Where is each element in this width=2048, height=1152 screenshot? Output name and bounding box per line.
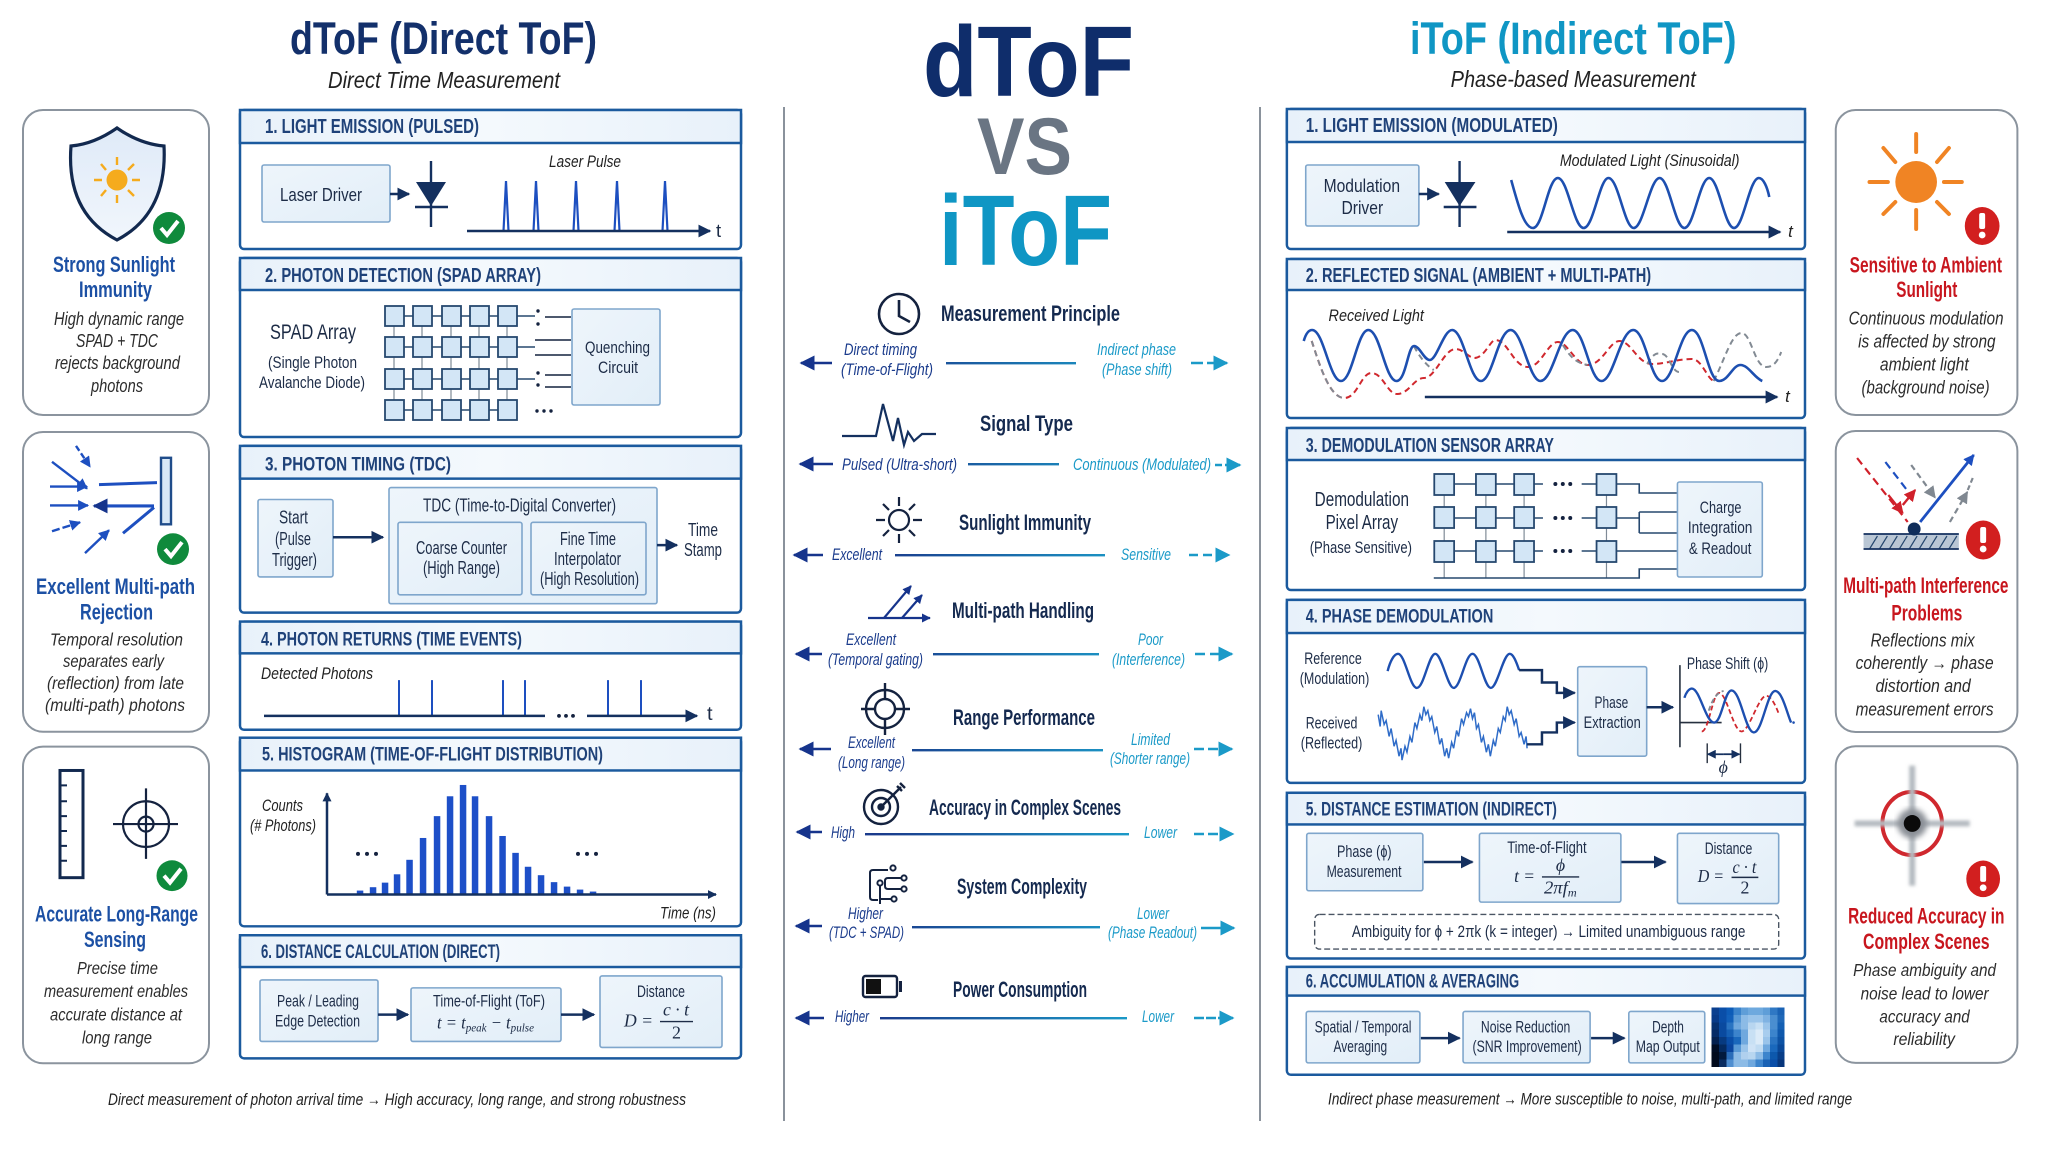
comparison row: range performance (800, 683, 1232, 772)
panel 4: phase demodulation: Received (1306, 714, 1357, 732)
panel 3: demodulation sensor array: Demodulation (1315, 489, 1409, 511)
panel 6: distance calculation (direct): 6. DISTANCE CALCULATION (DIRECT) (261, 941, 500, 963)
card: multi-path interference problems: coherently → phase (1856, 653, 1994, 673)
box: phase measurement: Phase (ϕ) (1337, 842, 1392, 861)
panel 5: histogram (240, 738, 741, 926)
panel 4: phase demodulation: Reference (1304, 649, 1362, 668)
panel 4: phase demodulation: (Modulation) (1300, 669, 1369, 688)
comparison row: signal type: Signal Type (980, 411, 1073, 436)
panel 3: photon timing (TDC): Stamp (684, 539, 722, 560)
box: noise reduction (1463, 1011, 1590, 1063)
diagram: demodulation pixel array (1434, 474, 1677, 578)
comparison row: measurement principle: Direct timing (844, 341, 918, 359)
box: distance formula: 2 (672, 1023, 681, 1042)
callout: ambiguity note (1315, 914, 1779, 949)
box: distance formula: D = (623, 1011, 653, 1031)
comparison row: signal type (800, 404, 1240, 474)
card: reduced accuracy in complex scenes: accuracy and (1879, 1006, 1971, 1026)
panel 5: histogram: 5. HISTOGRAM (TIME-OF-FLIGHT DISTRIBUTION) (262, 744, 603, 766)
card: multi-path interference problems: Problems (1891, 601, 1962, 626)
icon: circuit (870, 865, 907, 904)
box: start pulse trigger: Trigger) (272, 549, 317, 570)
arrow: received to phase extraction (1527, 723, 1575, 744)
comparison row: power consumption (796, 976, 1233, 1026)
panel 5: histogram: (# Photons) (250, 816, 316, 835)
icon: clock (879, 294, 919, 334)
comparison row: measurement principle: Measurement Principle (941, 301, 1120, 326)
icon: blurred target with alert (1855, 766, 2000, 897)
card: multi-path interference problems: measurement errors (1856, 700, 1994, 720)
panel 3: photon timing (TDC) (240, 446, 741, 613)
panel 3: photon timing (TDC): 3. PHOTON TIMING (TDC) (265, 454, 451, 476)
box: charge integration and readout (1677, 482, 1762, 577)
box: time-of-flight formula: t = (1514, 866, 1535, 886)
icon: multi-path reflections with check (50, 446, 189, 565)
box: modulation driver: Driver (1341, 197, 1383, 218)
comparison row: sunlight immunity: Sensitive (1121, 546, 1171, 564)
panel 6: distance calculation (direct) (240, 935, 741, 1058)
card: strong sunlight immunity (23, 110, 209, 415)
panel 4: photon returns (time events) (240, 622, 741, 730)
box: distance formula: c · t (1733, 857, 1757, 877)
panel 3: demodulation sensor array: Pixel Array (1326, 512, 1398, 534)
subheading: direct time measurement: Direct Time Measurement (328, 67, 561, 93)
comparison row: range performance: Range Performance (953, 705, 1095, 730)
box: phase measurement: Measurement (1327, 862, 1402, 881)
comparison row: multi-path handling (796, 586, 1232, 669)
box: depth map output: Map Output (1636, 1037, 1700, 1056)
card: accurate long-range sensing: measurement enables (44, 981, 188, 1001)
card: strong sunlight immunity: photons (90, 376, 143, 396)
comparison row: system complexity: Lower (1137, 905, 1170, 923)
card: reduced accuracy in complex scenes: Phase ambiguity and (1853, 960, 1997, 980)
card: strong sunlight immunity: Immunity (79, 277, 153, 302)
heading: iToF (Indirect ToF): iToF (Indirect ToF) (1410, 13, 1737, 64)
comparison row: signal type: Pulsed (Ultra-short) (842, 456, 957, 474)
comparison row: multi-path handling: (Interference) (1112, 651, 1185, 669)
card: strong sunlight immunity: SPAD + TDC (76, 331, 159, 351)
chart: sinusoidal modulated light: t (1788, 222, 1794, 241)
comparison row: multi-path handling: Poor (1138, 631, 1164, 649)
box: distance formula: 2 (1740, 878, 1749, 898)
panel 1: light emission (pulsed) (240, 110, 741, 249)
comparison row: measurement principle: (Phase shift) (1102, 361, 1172, 379)
panel 4: phase demodulation (1287, 600, 1805, 783)
panel 4: phase demodulation: 4. PHASE DEMODULATION (1306, 606, 1493, 628)
box: spatial / temporal averaging: Spatial / Temporal (1315, 1018, 1411, 1037)
comparison row: system complexity: System Complexity (957, 874, 1087, 899)
comparison row: accuracy in complex scenes: Lower (1144, 824, 1178, 842)
box: TDC with coarse counter and fine interpolator: (High Range) (423, 557, 500, 578)
card: sensitive to ambient sunlight: is affected by strong (1858, 331, 1996, 352)
card: reduced accuracy in complex scenes: Complex Scenes (1863, 929, 1990, 954)
diagram: SPAD pixel array (385, 306, 571, 420)
box: time-of-flight formula (411, 988, 561, 1041)
card: sensitive to ambient sunlight: (background noise) (1862, 377, 1990, 398)
comparison row: range performance: (Long range) (838, 754, 905, 772)
panel 3: demodulation sensor array (1287, 428, 1805, 590)
comparison row: system complexity: (TDC + SPAD) (829, 924, 904, 942)
box: phase extraction (1578, 667, 1647, 756)
icon: crosshair target with check (113, 788, 188, 891)
comparison row: system complexity: (Phase Readout) (1108, 924, 1197, 942)
box: phase extraction: Extraction (1584, 713, 1641, 732)
box: time-of-flight formula (1479, 833, 1621, 902)
card: strong sunlight immunity: rejects background (55, 353, 181, 373)
chart: time-of-flight histogram: Time (ns) (660, 903, 716, 922)
panel 1: light emission (pulsed): Laser Pulse (549, 152, 621, 171)
box: peak / leading edge detection: Peak / Leading (277, 992, 359, 1011)
panel 2: photon detection (SPAD array): Avalanche Diode) (259, 373, 365, 392)
callout: ambiguity note: Ambiguity for ϕ + 2πk (k = integer) → Limited unambiguous range (1352, 922, 1745, 941)
box: depth map output: Depth (1652, 1018, 1684, 1037)
chart: laser pulse train: t (716, 220, 721, 241)
card: sensitive to ambient sunlight: ambient light (1880, 354, 1970, 375)
icon: crosshair target (861, 683, 910, 735)
box: start pulse trigger: (Pulse (275, 528, 311, 549)
box: time-of-flight formula: − t (487, 1013, 512, 1033)
box: charge integration and readout: & Readout (1689, 539, 1752, 558)
card: accurate long-range sensing: long range (82, 1028, 152, 1047)
lower right group (panels 4-6, card 3, footer) (1287, 600, 2017, 1108)
chart: sinusoidal modulated light (1507, 178, 1794, 241)
chart: received light with ambient and multi-path waves (1304, 330, 1791, 406)
chart: noisy received wave (1378, 707, 1527, 760)
panel 3: photon timing (TDC): Time (688, 519, 718, 540)
panel 3: demodulation sensor array: 3. DEMODULATION SENSOR ARRAY (1306, 435, 1554, 457)
box: time-of-flight formula: pulse (510, 1021, 535, 1035)
box: TDC with coarse counter and fine interpolator: TDC (Time-to-Digital Converter) (423, 494, 616, 515)
comparison row: range performance: Limited (1131, 731, 1171, 749)
panel 4: photon returns (time events): Detected Photons (261, 664, 373, 683)
box: peak / leading edge detection: Edge Detection (275, 1012, 360, 1031)
comparison row: signal type: Continuous (Modulated) (1073, 456, 1211, 474)
card: strong sunlight immunity: Strong Sunlight (53, 252, 175, 277)
card: excellent multi-path rejection: (reflection) from late (47, 673, 184, 693)
card: accurate long-range sensing (23, 747, 209, 1063)
chart: detected photon events: t (707, 703, 713, 725)
box: distance formula: D = (1697, 866, 1724, 886)
icon: bullseye with dart (864, 783, 905, 824)
comparison row: multi-path handling: Multi-path Handling (952, 598, 1094, 623)
chart: reference modulation wave (1388, 654, 1519, 688)
main title: VS: VS (977, 102, 1072, 192)
card: excellent multi-path rejection (23, 432, 209, 732)
image: depth map (1712, 1007, 1785, 1067)
footer note: iToF summary: Indirect phase measurement → More susceptible to noise, multi-path, and limited range (1328, 1089, 1852, 1108)
icon: ruler (60, 770, 83, 878)
main title: iToF: iToF (939, 175, 1112, 287)
icon: orange sun with alert (1870, 134, 2000, 245)
comparison row: accuracy in complex scenes (797, 783, 1233, 842)
card: excellent multi-path rejection: Rejection (80, 600, 153, 625)
box: distance formula: Distance (637, 982, 685, 1001)
comparison row: system complexity: Higher (848, 905, 884, 923)
icon: laser diode (415, 161, 448, 227)
box: spatial / temporal averaging: Averaging (1334, 1037, 1387, 1056)
panel 5: distance estimation (indirect) (1287, 793, 1805, 958)
box: laser driver: Laser Driver (280, 184, 362, 205)
box: TDC with coarse counter and fine interpolator (389, 488, 657, 604)
panel 3: demodulation sensor array: (Phase Sensitive) (1310, 538, 1412, 557)
panel 2: reflected signal (1287, 259, 1805, 418)
box: modulation driver (1306, 165, 1419, 226)
box: distance formula: c · t (663, 1000, 690, 1020)
card: excellent multi-path rejection: Excellent Multi-path (36, 574, 195, 599)
panel 5: histogram: Counts (262, 796, 303, 815)
main title: dToF: dToF (923, 6, 1134, 118)
card: excellent multi-path rejection: Temporal resolution (50, 629, 183, 649)
panel 6: accumulation and averaging: 6. ACCUMULATION & AVERAGING (1306, 971, 1519, 993)
panel 1: light emission (modulated): 1. LIGHT EMISSION (MODULATED) (1306, 115, 1558, 137)
box: distance formula (600, 976, 722, 1047)
card: reduced accuracy in complex scenes (1836, 746, 2017, 1063)
card: sensitive to ambient sunlight (1836, 110, 2017, 415)
comparison row: power consumption: Higher (835, 1008, 870, 1026)
box: phase measurement (1307, 833, 1423, 891)
panel 4: phase demodulation: Phase Shift (ϕ) (1687, 654, 1768, 673)
card: excellent multi-path rejection: separates early (63, 651, 165, 671)
comparison row: range performance: Excellent (848, 734, 896, 752)
panel 2: reflected signal: 2. REFLECTED SIGNAL (AMBIENT + MULTI-PATH) (1306, 265, 1651, 287)
panel 1: light emission (pulsed): 1. LIGHT EMISSION (PULSED) (265, 116, 479, 138)
panel 2: photon detection (SPAD array): (Single Photon (268, 353, 357, 372)
panel 4: phase demodulation: (Reflected) (1301, 733, 1362, 752)
panel 4: photon returns (time events): 4. PHOTON RETURNS (TIME EVENTS) (261, 628, 522, 650)
comparison row: multi-path handling: (Temporal gating) (828, 651, 923, 669)
panel 6: accumulation and averaging (1287, 967, 1805, 1075)
panel 2: photon detection (SPAD array) (240, 258, 741, 437)
icon: surface reflections with alert (1857, 455, 2001, 560)
box: time-of-flight formula: m (1568, 886, 1577, 900)
box: charge integration and readout: Integration (1688, 518, 1752, 537)
box: TDC with coarse counter and fine interpolator: Fine Time (560, 528, 616, 549)
panel 1: light emission (modulated) (1287, 109, 1805, 249)
card: strong sunlight immunity: High dynamic range (54, 309, 184, 329)
icon: laser diode (1444, 161, 1476, 227)
comparison row: measurement principle: (Time-of-Flight) (841, 361, 933, 379)
box: start pulse trigger (258, 499, 333, 577)
card: accurate long-range sensing: accurate distance at (50, 1005, 183, 1025)
box: TDC with coarse counter and fine interpolator: Interpolator (554, 548, 621, 569)
box: modulation driver: Modulation (1324, 175, 1400, 196)
card: sensitive to ambient sunlight: Continuous modulation (1849, 308, 2004, 329)
card: accurate long-range sensing: Accurate Long-Range (35, 901, 198, 926)
card: multi-path interference problems: distortion and (1875, 676, 1972, 696)
box: laser driver (262, 165, 390, 222)
comparison row: measurement principle (801, 294, 1227, 379)
icon: sun (876, 497, 922, 543)
box: depth map output (1629, 1011, 1705, 1063)
card: accurate long-range sensing: Sensing (84, 927, 146, 952)
footer note: dToF summary: Direct measurement of photon arrival time → High accuracy, long range, and strong robustness (108, 1090, 686, 1109)
box: noise reduction: Noise Reduction (1481, 1018, 1570, 1037)
box: quenching circuit: Circuit (598, 358, 638, 377)
box: time-of-flight formula: t = t (437, 1013, 468, 1033)
box: noise reduction: (SNR Improvement) (1472, 1037, 1582, 1056)
comparison row: multi-path handling: Excellent (846, 631, 897, 649)
comparison row: accuracy in complex scenes: High (831, 824, 855, 842)
panel 2: reflected signal: Received Light (1329, 306, 1425, 325)
comparison row: sunlight immunity: Sunlight Immunity (959, 510, 1092, 535)
icon: battery (863, 976, 902, 997)
comparison row: sunlight immunity (794, 497, 1229, 564)
box: time-of-flight formula: Time-of-Flight (1507, 838, 1587, 857)
box: time-of-flight formula: Time-of-Flight (ToF) (433, 992, 545, 1011)
card: sensitive to ambient sunlight: Sunlight (1896, 277, 1958, 302)
box: TDC with coarse counter and fine interpolator: (High Resolution) (540, 568, 639, 589)
center column: dToF vs iToF comparison (784, 6, 1260, 1121)
right side: iToF (1287, 13, 2017, 1108)
comparison row: power consumption: Power Consumption (953, 977, 1087, 1002)
chart: received light with ambient and multi-path waves: t (1785, 387, 1791, 406)
comparison row: range performance: (Shorter range) (1110, 750, 1190, 768)
left side: dToF (23, 13, 741, 1109)
box: phase extraction: Phase (1595, 693, 1628, 712)
box: time-of-flight formula: ϕ (1556, 855, 1565, 875)
box: peak / leading edge detection (260, 980, 378, 1041)
panel 4: phase demodulation: ϕ (1719, 757, 1728, 777)
comparison row: sunlight immunity: Excellent (832, 546, 883, 564)
box: quenching circuit: Quenching (585, 338, 650, 357)
box: time-of-flight formula: peak (465, 1021, 487, 1035)
heading: dToF (Direct ToF): dToF (Direct ToF) (290, 13, 597, 64)
arrow: reference to phase extraction (1519, 670, 1575, 693)
comparison row: system complexity (796, 865, 1234, 942)
chart: time-of-flight histogram (327, 785, 716, 922)
icon: pulse waveform (842, 404, 936, 445)
comparison row: measurement principle: Indirect phase (1097, 341, 1176, 359)
lower left group (panels 3-6, cards 2-3, footer) (23, 432, 741, 1109)
card: excellent multi-path rejection: (multi-path) photons (45, 695, 185, 715)
box: distance formula (1677, 833, 1779, 904)
panel 1: light emission (modulated): Modulated Light (Sinusoidal) (1560, 151, 1739, 170)
panel 5: distance estimation (indirect): 5. DISTANCE ESTIMATION (INDIRECT) (1306, 799, 1557, 821)
icon: multi-path arrows (868, 586, 930, 618)
panel 2: photon detection (SPAD array): SPAD Array (270, 321, 356, 344)
card: multi-path interference problems: Reflections mix (1870, 630, 1976, 650)
box: quenching circuit (572, 309, 660, 405)
chart: detected photon events (264, 680, 713, 725)
subheading: phase-based measurement: Phase-based Measurement (1451, 66, 1697, 92)
box: charge integration and readout: Charge (1700, 498, 1741, 517)
box: TDC with coarse counter and fine interpolator: Coarse Counter (416, 537, 507, 558)
comparison row: power consumption: Lower (1142, 1008, 1175, 1026)
card: multi-path interference problems (1836, 431, 2017, 732)
chart: laser pulse train (467, 181, 721, 241)
box: time-of-flight formula: 2πf (1544, 878, 1567, 898)
card: reduced accuracy in complex scenes: reliability (1893, 1029, 1956, 1049)
panel 2: photon detection (SPAD array): 2. PHOTON DETECTION (SPAD ARRAY) (265, 265, 541, 287)
box: distance formula: Distance (1705, 839, 1752, 858)
box: start pulse trigger: Start (279, 506, 308, 527)
comparison row: accuracy in complex scenes: Accuracy in Complex Scenes (929, 795, 1121, 820)
icon: shield with sun and check (71, 128, 185, 244)
chart: phase shift between waves (1680, 665, 1795, 763)
card: reduced accuracy in complex scenes: noise lead to lower (1861, 984, 1990, 1004)
card: accurate long-range sensing: Precise time (77, 958, 158, 978)
box: spatial / temporal averaging (1306, 1011, 1420, 1063)
